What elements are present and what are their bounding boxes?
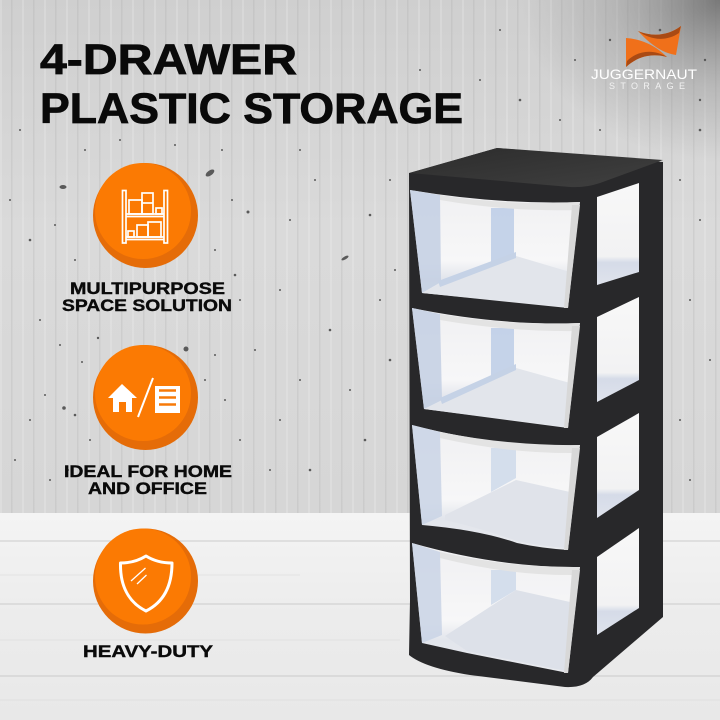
- frame body: [409, 148, 663, 687]
- icon badge: home and document: [93, 345, 198, 450]
- label: IDEAL FOR HOME: [64, 463, 232, 481]
- title: 4-DRAWER: [40, 36, 297, 84]
- drawer 2: [412, 308, 580, 428]
- feature: ideal for home and office: [64, 345, 232, 498]
- icon badge: warehouse shelves: [93, 163, 198, 268]
- background: wooden floor: [0, 513, 720, 720]
- logo: Juggernaut Storage: STORAGE: [609, 81, 685, 91]
- label: AND OFFICE: [88, 480, 207, 498]
- logo mark: [626, 26, 681, 67]
- title: PLASTIC STORAGE: [40, 85, 463, 133]
- feature: heavy-duty: [83, 528, 213, 661]
- label: [64, 463, 232, 498]
- title: [40, 36, 463, 133]
- drawer 3: [412, 425, 580, 550]
- logo: Juggernaut Storage: [591, 26, 697, 91]
- product: four-drawer plastic storage tower: [409, 148, 663, 687]
- label: SPACE SOLUTION: [62, 297, 232, 315]
- feature: multipurpose space solution: [62, 163, 232, 315]
- label: [62, 280, 232, 315]
- top surface: [410, 148, 663, 187]
- label: MULTIPURPOSE: [70, 280, 225, 298]
- label: HEAVY-DUTY: [83, 643, 213, 661]
- drawer 1: [410, 190, 580, 308]
- background: concrete wall: [0, 0, 720, 513]
- drawer 4: [412, 543, 580, 673]
- icon badge: shield: [93, 528, 198, 634]
- logo: Juggernaut Storage: JUGGERNAUT: [591, 66, 697, 82]
- side windows: [597, 183, 639, 635]
